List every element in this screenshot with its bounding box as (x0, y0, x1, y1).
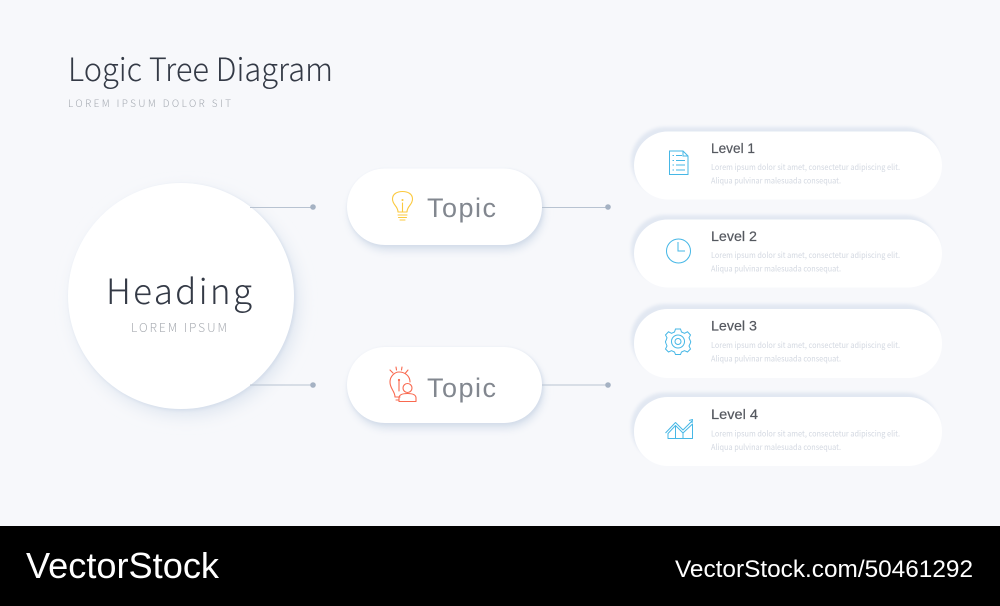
panel: level 3 (631, 304, 942, 378)
level heading: Level 4 (711, 407, 759, 422)
heading text: Heading (106, 264, 252, 315)
level description: Aliqua pulvinar malesuada consequat. (711, 264, 841, 274)
subtitle: LOREM IPSUM DOLOR SIT (68, 95, 231, 110)
level heading: Level 3 (711, 318, 757, 334)
level description (711, 162, 900, 186)
icon: light bulb (392, 192, 412, 220)
level description (711, 340, 900, 364)
level description: Aliqua pulvinar malesuada consequat. (711, 354, 841, 364)
panel: upper topic (347, 168, 544, 251)
connector: heading to upper topic (250, 204, 316, 210)
footer logo: VectorStock (26, 545, 220, 586)
heading caption: LOREM IPSUM (131, 319, 227, 336)
level description: Lorem ipsum dolor sit amet, consectetur adipiscing elit. (711, 162, 900, 173)
panel: level 2 (631, 215, 942, 288)
panel: lower topic (347, 347, 544, 429)
icon: idea person (390, 367, 416, 402)
topic label: Topic (427, 373, 496, 403)
panel: level 1 (631, 127, 942, 200)
level description: Lorem ipsum dolor sit amet, consectetur adipiscing elit. (711, 250, 900, 261)
level heading: Level 2 (711, 229, 757, 244)
icon: growth chart (666, 420, 692, 438)
connector: heading to lower topic (250, 382, 316, 388)
footer url: VectorStock.com/50461292 (675, 556, 973, 583)
level description: Aliqua pulvinar malesuada consequat. (711, 442, 841, 453)
footer band (0, 526, 1000, 606)
topic label: Topic (427, 193, 496, 223)
panel: heading circle (68, 183, 299, 416)
level description (711, 428, 900, 453)
level description: Aliqua pulvinar malesuada consequat. (711, 176, 841, 186)
panel: level 4 (631, 392, 942, 466)
title: Logic Tree Diagram (68, 45, 333, 91)
icon: checklist document (670, 151, 688, 174)
icon: clock (666, 239, 690, 263)
level description (711, 250, 900, 274)
connector: lower topic to levels (542, 382, 611, 388)
level description: Lorem ipsum dolor sit amet, consectetur adipiscing elit. (711, 340, 900, 351)
level heading: Level 1 (711, 141, 755, 156)
connector: upper topic to levels (542, 204, 611, 210)
icon: gear (666, 329, 691, 354)
level description: Lorem ipsum dolor sit amet, consectetur adipiscing elit. (711, 428, 900, 440)
